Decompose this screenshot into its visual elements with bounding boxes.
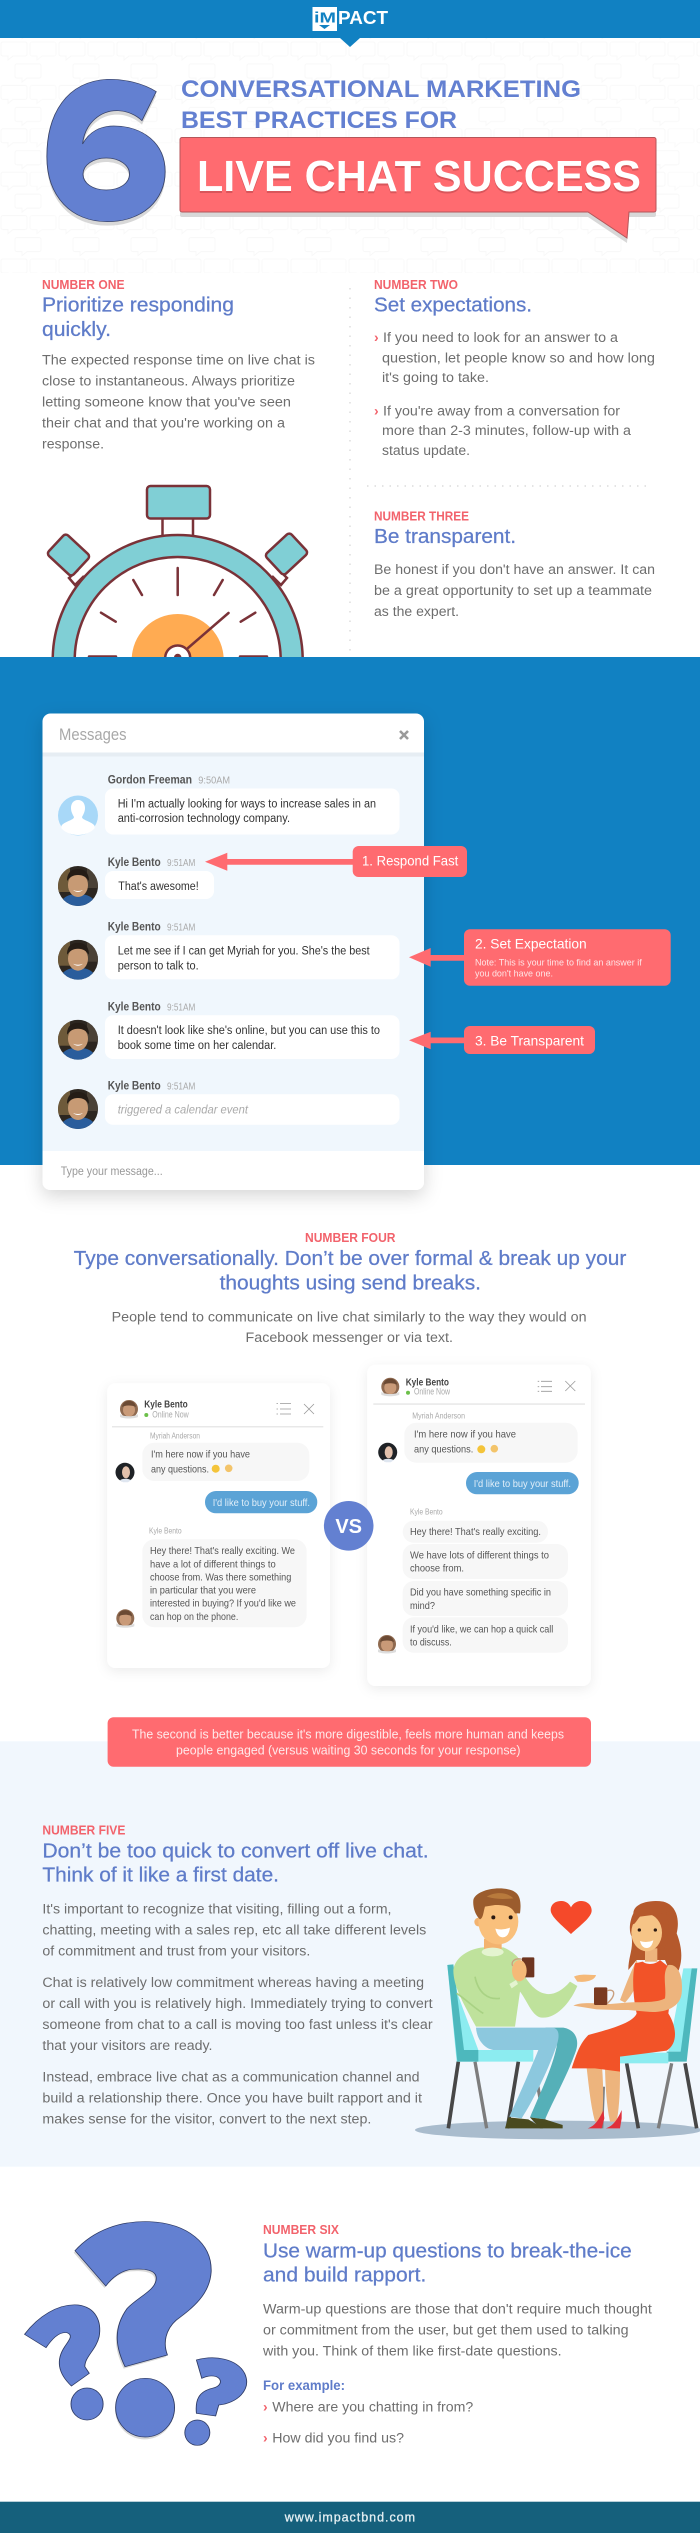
message: Gordon Freeman: 9:50AM — [198, 775, 230, 786]
panel: chat example long message: in particular that you were — [150, 1584, 256, 1596]
section: number five: NUMBER FIVE — [42, 1823, 125, 1837]
panel: chat example long message: I'd like to buy your stuff. — [213, 1497, 310, 1509]
message: Kyle Bento 2: person to talk to. — [118, 960, 199, 972]
section: number three: Be transparent. — [374, 526, 516, 548]
panel: chat example send breaks: choose from. — [410, 1563, 464, 1575]
section: number one: Prioritize responding — [42, 294, 234, 316]
section: number four heading: Type conversationally. Don’t be over formal & break up your — [74, 1248, 627, 1270]
message: Gordon Freeman: anti-corrosion technology company. — [118, 813, 290, 825]
section: number three: as the expert. — [374, 604, 459, 619]
callout: respond fast: 1. Respond Fast — [362, 852, 458, 868]
title banner: live chat success: LIVE CHAT SUCCESS — [197, 152, 641, 201]
section: number five: Chat is relatively low commitment whereas having a meeting — [42, 1975, 424, 1990]
message: Kyle Bento 1: Kyle Bento — [108, 857, 161, 869]
section: number two — [374, 278, 655, 458]
section: number six: How did you find us? — [272, 2431, 404, 2446]
section: number five: or call with you is relatively high. Immediately trying to convert — [42, 1996, 433, 2011]
big number 6 — [47, 79, 165, 226]
callout: second is better — [108, 1717, 591, 1767]
title: CONVERSATIONAL MARKETING — [181, 76, 581, 103]
section: number six: NUMBER SIX — [263, 2223, 340, 2237]
section: number two: If you need to look for an answer to a — [383, 330, 619, 345]
panel: chat example send breaks: to discuss. — [410, 1637, 452, 1649]
message: Kyle Bento 4 — [58, 1080, 400, 1129]
callout: be transparent: 3. Be Transparent — [475, 1032, 584, 1048]
chat header — [59, 726, 408, 744]
callout: respond fast — [205, 846, 467, 877]
panel: chat example long message: Myriah Anderson — [150, 1432, 200, 1441]
section: number five: It's important to recognize that visiting, filling out a form, — [42, 1901, 392, 1916]
panel: chat example send breaks: We have lots of different things to — [410, 1549, 549, 1561]
panel: chat example send breaks: any questions. — [414, 1444, 473, 1456]
title banner: live chat success — [180, 138, 656, 243]
panel: chat example long message: Kyle Bento — [144, 1399, 188, 1411]
section: number one: response. — [42, 436, 104, 452]
chat header: Messages — [59, 726, 126, 744]
message: Gordon Freeman — [58, 774, 400, 836]
section: number six: Where are you chatting in from? — [272, 2399, 473, 2414]
section: number five: Instead, embrace live chat as a communication channel and — [42, 2069, 420, 2084]
panel: chat example send breaks: If you'd like, we can hop a quick call — [410, 1623, 553, 1635]
message: Kyle Bento 3: book some time on her calendar. — [118, 1040, 276, 1052]
footer bar: www.impactbnd.com — [284, 2510, 415, 2524]
icon: heart — [551, 1901, 592, 1934]
panel: light section background — [0, 1741, 700, 2167]
panel: chat example send breaks: Kyle Bento — [406, 1376, 449, 1388]
panel: chat example send breaks — [367, 1365, 591, 1686]
panel: chat example long message: choose from. Was there something — [150, 1571, 291, 1583]
section: number six: For example: — [263, 2378, 345, 2393]
message: Kyle Bento 3: 9:51AM — [167, 1003, 195, 1014]
vs badge — [324, 1501, 374, 1551]
panel: chat example long message: Online Now — [152, 1409, 189, 1419]
section: number six: › — [263, 2430, 268, 2446]
panel: chat example send breaks: Did you have something specific in — [410, 1587, 551, 1599]
message: Kyle Bento 2: Kyle Bento — [108, 922, 161, 934]
section: number four heading: thoughts using send breaks. — [220, 1272, 481, 1294]
panel: chat example send breaks: Myriah Anderson — [412, 1411, 465, 1420]
section: number one: their chat and that you're working on a — [42, 416, 286, 430]
section: number three — [374, 510, 655, 619]
panel: chat example send breaks: Kyle Bento — [410, 1508, 443, 1517]
section: number five: build a relationship there. Once you have built rapport and it — [42, 2090, 422, 2105]
panel: chat example long message: interested in buying? If you'd like we — [150, 1598, 296, 1610]
panel: chat example long message: have a lot of different things to — [150, 1558, 276, 1570]
message: Kyle Bento 3 — [58, 1002, 400, 1060]
message: Kyle Bento 1: That's awesome! — [118, 881, 199, 893]
section: number two: status update. — [382, 443, 470, 458]
section: number four heading: Facebook messenger or via text. — [246, 1330, 453, 1345]
section: number two: If you're away from a conversation for — [383, 404, 621, 418]
man — [453, 1888, 596, 2128]
illustration: question marks — [25, 2222, 247, 2445]
panel: chat window — [42, 714, 424, 1190]
section: number three: be a great opportunity to set up a teammate — [374, 583, 652, 598]
section: number two: NUMBER TWO — [374, 278, 458, 292]
section: number two: › — [374, 329, 379, 345]
panel: chat example send breaks: Online Now — [414, 1387, 450, 1397]
section: number two: question, let people know so and how long — [382, 350, 655, 366]
logo: IMPACT: iM — [314, 10, 336, 26]
message: Gordon Freeman: Gordon Freeman — [108, 774, 192, 786]
section: number one: quickly. — [42, 319, 111, 341]
message input: Type your message... — [61, 1166, 163, 1178]
section: number six — [262, 2223, 652, 2446]
section: number five — [42, 1823, 433, 2126]
section: number one: The expected response time on live chat is — [42, 352, 315, 368]
logo: IMPACT — [312, 7, 389, 31]
stopwatch illustration — [46, 484, 308, 657]
message: Kyle Bento 1 — [58, 857, 214, 906]
panel: chat example long message: I'm here now if you have — [151, 1449, 250, 1461]
section: number five: Don’t be too quick to convert off live chat. — [42, 1840, 429, 1862]
section: number six: Warm-up questions are those that don't require much thought — [263, 2301, 652, 2316]
callout: set expectation: 2. Set Expectation — [475, 936, 587, 952]
panel: chat example long message: can hop on the phone. — [150, 1611, 238, 1623]
callout: be transparent — [409, 1026, 595, 1054]
title — [181, 76, 581, 134]
section: number five: chatting, meeting with a sales rep, etc all take different levels — [42, 1922, 427, 1937]
woman — [572, 1901, 682, 2128]
callout: set expectation — [409, 929, 671, 986]
section: number six: with you. Think of them like first-date questions. — [262, 2343, 562, 2358]
illustration: couple on a first date — [415, 1888, 700, 2139]
section: number six: and build rapport. — [263, 2265, 426, 2287]
message: Gordon Freeman: Hi I'm actually looking for ways to increase sales in an — [118, 798, 376, 810]
section: number six: Use warm-up questions to break-the-ice — [263, 2240, 632, 2262]
section: number four heading: People tend to communicate on live chat similarly to the way they would on — [112, 1309, 587, 1324]
message: Kyle Bento 2 — [58, 922, 400, 980]
message: Kyle Bento 4: 9:51AM — [167, 1081, 195, 1092]
section: number six: or commitment from the user, but get them used to talking — [263, 2322, 629, 2337]
message: Kyle Bento 4: Kyle Bento — [108, 1080, 161, 1092]
section: number two: Set expectations. — [374, 294, 532, 316]
section: number five: of commitment and trust from your visitors. — [42, 1943, 310, 1958]
icon: right question mark — [185, 2358, 247, 2445]
section: number five: makes sense for the visitor, convert to the next step. — [42, 2111, 371, 2126]
background pattern of chat bubbles — [0, 38, 700, 273]
callout: set expectation: Note: This is your time to find an answer if — [475, 958, 642, 969]
section: number one: NUMBER ONE — [42, 278, 124, 292]
section: number two: it's going to take. — [382, 370, 489, 385]
callout: second is better: The second is better because it's more digestible, feels more human and keeps — [132, 1726, 564, 1741]
panel: chat example long message — [107, 1383, 330, 1668]
panel: chat example long message: any questions. — [151, 1463, 209, 1475]
section: number four heading: NUMBER FOUR — [305, 1231, 396, 1245]
panel: chat example send breaks: I'm here now if you have — [414, 1428, 516, 1440]
title banner: live chat success: LIVE CHAT SUCCESS — [197, 154, 641, 203]
panel: chat example send breaks: Hey there! That's really exciting. — [410, 1526, 541, 1538]
section: number five: Think of it like a first date. — [42, 1865, 279, 1887]
icon: large question mark — [75, 2222, 211, 2437]
section: number five: that your visitors are ready. — [42, 2038, 213, 2053]
callout: second is better: people engaged (versus waiting 30 seconds for your response) — [176, 1742, 520, 1757]
message: Kyle Bento 3: It doesn't look like she's online, but you can use this to — [118, 1025, 380, 1037]
title: BEST PRACTICES FOR — [181, 107, 457, 134]
callout: set expectation: you don't have one. — [475, 969, 553, 980]
section: number six: › — [263, 2398, 268, 2414]
section: number three: Be honest if you don't have an answer. It can — [374, 562, 655, 577]
message: Kyle Bento 4: triggered a calendar event — [118, 1104, 249, 1116]
icon: left question mark — [25, 2305, 103, 2420]
message: Kyle Bento 2: Let me see if I can get Myriah for you. She's the best — [118, 945, 370, 957]
section: number three: NUMBER THREE — [374, 510, 469, 524]
section: number one: letting someone know that you've seen — [42, 394, 291, 410]
message: Kyle Bento 3: Kyle Bento — [108, 1002, 161, 1014]
section: number five: someone from chat to a call is moving too fast unless it's clear — [42, 2017, 433, 2032]
section: number two: › — [374, 402, 379, 418]
vs badge: VS — [335, 1516, 362, 1538]
message: Kyle Bento 2: 9:51AM — [167, 923, 195, 934]
message: Kyle Bento 1: 9:51AM — [167, 858, 195, 869]
panel: chat example long message: Hey there! That's really exciting. We — [150, 1545, 295, 1557]
section: number four heading — [74, 1231, 627, 1345]
panel: chat example send breaks: mind? — [410, 1600, 435, 1612]
dotted dividers — [349, 288, 351, 657]
section: number one — [42, 278, 315, 452]
header bar — [0, 0, 700, 47]
footer bar — [0, 2502, 700, 2533]
blue band — [0, 657, 700, 1165]
section: number two: more than 2-3 minutes, follow-up with a — [382, 423, 632, 438]
logo: IMPACT: PACT — [338, 7, 389, 28]
section: number one: close to instantaneous. Always prioritize — [42, 374, 295, 388]
panel: chat example long message: Kyle Bento — [149, 1527, 182, 1536]
panel: chat example send breaks: I'd like to buy your stuff. — [474, 1478, 571, 1490]
